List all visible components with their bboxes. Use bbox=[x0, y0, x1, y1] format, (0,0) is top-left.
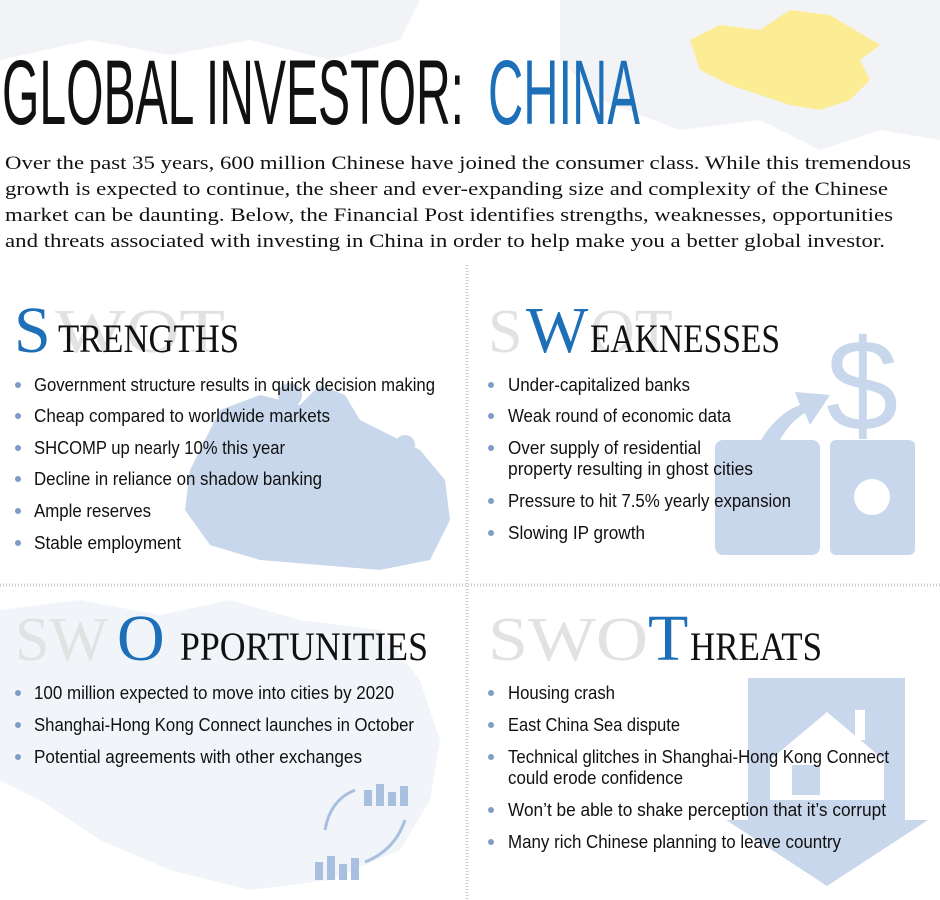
heading: OT bbox=[590, 298, 673, 366]
list: Many rich Chinese planning to leave country bbox=[508, 832, 841, 852]
list bbox=[15, 375, 435, 553]
heading: SW bbox=[15, 606, 108, 674]
intro paragraph: and threats associated with investing in China in order to help make you a better global investor. bbox=[5, 231, 885, 252]
list bbox=[488, 683, 889, 852]
list: Ample reserves bbox=[34, 501, 151, 521]
heading: WOT bbox=[55, 298, 225, 366]
heading bbox=[15, 602, 428, 675]
heading: S bbox=[488, 298, 522, 366]
illustration: safe, dollar and arrow bbox=[715, 312, 915, 555]
title: CHINA bbox=[488, 42, 640, 144]
illustration: house down arrow bbox=[726, 678, 928, 886]
panel: strengths bbox=[14, 294, 450, 570]
heading: S bbox=[14, 294, 51, 367]
list: property resulting in ghost cities bbox=[508, 459, 753, 479]
list: Stable employment bbox=[34, 533, 181, 553]
list: Weak round of economic data bbox=[508, 406, 732, 426]
heading: W bbox=[526, 294, 589, 367]
heading bbox=[488, 294, 780, 367]
heading: SWO bbox=[488, 606, 648, 674]
heading: HREATS bbox=[690, 624, 822, 669]
list: Technical glitches in Shanghai-Hong Kong Connect bbox=[508, 747, 889, 767]
list: Government structure results in quick decision making bbox=[34, 375, 435, 395]
heading: PPORTUNITIES bbox=[180, 624, 428, 669]
background world map bbox=[0, 0, 940, 150]
list: SHCOMP up nearly 10% this year bbox=[34, 438, 285, 458]
list: Cheap compared to worldwide markets bbox=[34, 406, 330, 426]
list: East China Sea dispute bbox=[508, 715, 680, 735]
heading: T bbox=[648, 602, 688, 675]
heading bbox=[488, 602, 822, 675]
china map yellow bbox=[690, 10, 880, 110]
intro paragraph: growth is expected to continue, the sheer and ever-expanding size and complexity of the Chinese bbox=[5, 179, 888, 200]
heading: EAKNESSES bbox=[590, 316, 780, 361]
list: Shanghai-Hong Kong Connect launches in October bbox=[34, 715, 414, 735]
list: Decline in reliance on shadow banking bbox=[34, 469, 322, 489]
illustration: people bbox=[185, 383, 450, 570]
list: Housing crash bbox=[508, 683, 615, 703]
list: Over supply of residential bbox=[508, 438, 701, 458]
list bbox=[15, 683, 414, 767]
list: Slowing IP growth bbox=[508, 523, 645, 543]
list: could erode confidence bbox=[508, 768, 683, 788]
heading: TRENGTHS bbox=[58, 316, 239, 361]
list: Potential agreements with other exchanges bbox=[34, 747, 362, 767]
panel: opportunities bbox=[0, 600, 440, 890]
intro paragraph: market can be daunting. Below, the Financial Post identifies strengths, weaknesses, opportunities bbox=[5, 205, 893, 226]
intro paragraph bbox=[5, 153, 911, 252]
illustration: china map and charts bbox=[0, 600, 440, 890]
panel: weaknesses bbox=[488, 294, 915, 555]
heading bbox=[14, 294, 239, 367]
list: Pressure to hit 7.5% yearly expansion bbox=[508, 491, 791, 511]
illustration: safe, dollar and arrow: $ bbox=[826, 312, 898, 458]
heading: O bbox=[117, 602, 165, 675]
list: Won’t be able to shake perception that it’s corrupt bbox=[508, 800, 886, 820]
title: GLOBAL INVESTOR: bbox=[2, 42, 464, 144]
list bbox=[488, 375, 791, 543]
intro paragraph: Over the past 35 years, 600 million Chinese have joined the consumer class. While this tremendous bbox=[5, 153, 911, 174]
panel: threats bbox=[488, 602, 928, 886]
list: 100 million expected to move into cities by 2020 bbox=[34, 683, 394, 703]
list: Under-capitalized banks bbox=[508, 375, 690, 395]
